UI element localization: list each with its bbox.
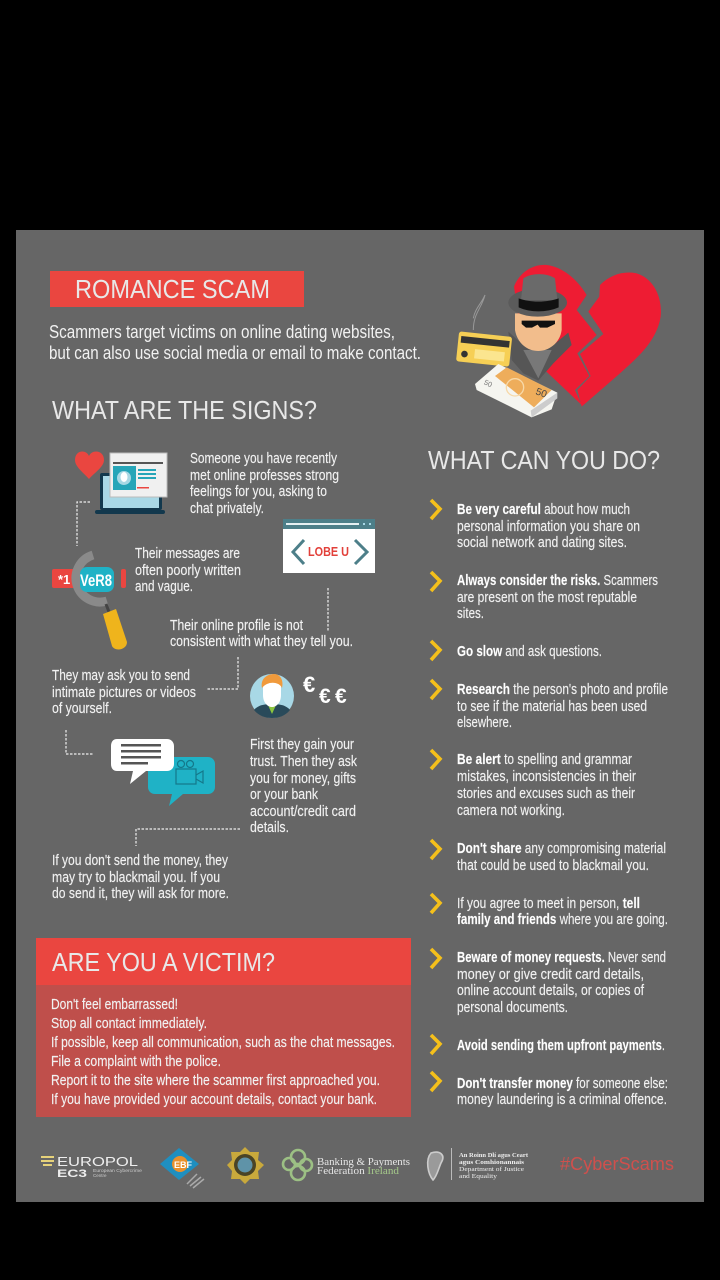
icon: avatar and euros: € [319,685,331,708]
text: advice list [457,501,668,1108]
text: poorly written: often poorly written [135,562,241,579]
panel: are you a victim: Don't feel embarrassed! [51,996,178,1013]
text: advice list: Don't transfer money for someone else: [457,1075,668,1092]
text: advice list: Go slow and ask questions. [457,643,602,660]
text: advice list: are present on the most reputable [457,589,637,606]
arrow: laptop to messages [77,502,90,546]
logo: Banking and Payments Federation Ireland: Federation Ireland [317,1166,400,1177]
icon: magnifier over garbled text [52,555,127,649]
text: advice list: that could be used to blackmail you. [457,857,649,874]
panel: are you a victim: If possible, keep all communication, such as the chat messages. [51,1034,395,1051]
icon: browser window LOBE U: LOBE U [308,544,349,559]
panel: are you a victim: Report it to the site where the scammer first approached you. [51,1072,380,1089]
text: gain your trust: First they gain your [250,736,354,753]
panel: grey background [16,230,704,1202]
logo: Banking and Payments Federation Ireland [283,1150,410,1180]
arrow: pictures text to chat bubbles [66,730,94,754]
text: blackmail: do send it, they will ask for more. [52,885,229,902]
text: gain your trust [250,736,357,836]
text: strong feelings: Someone you have recently [190,450,337,467]
icon: spy with broken heart: 50 [534,386,549,401]
text: advice list: personal documents. [457,999,568,1016]
text: intimate pictures: of yourself. [52,700,112,717]
text: advice list: mistakes, inconsistencies in their [457,768,636,785]
text: gain your trust: you for money, gifts [250,770,356,787]
arrow: trust text to blackmail text [136,829,240,846]
text: poorly written: Their messages are [135,545,240,562]
text: strong feelings: met online professes strong [190,467,339,484]
icons: yellow chevrons [431,500,440,1091]
text: advice list: money laundering is a criminal offence. [457,1091,667,1108]
icon: magnifier over garbled text: *1 [58,572,70,587]
logo: Department of Justice harp: An Roinn Dlí agus Ceart [459,1152,529,1159]
text: advice list: stories and excuses such as their [457,785,635,802]
text: advice list: social network and dating sites. [457,534,627,551]
arrow: browser to profile text [327,588,329,632]
text: inconsistent profile: consistent with what they tell you. [170,633,353,650]
text: poorly written: and vague. [135,578,193,595]
text: advice list: money or give credit card details, [457,966,644,983]
text: advice list: camera not working. [457,802,565,819]
text: advice list: Be alert to spelling and grammar [457,751,632,768]
arrow: profile text to intimate pictures [206,657,238,689]
text: blackmail: may try to blackmail you. If you [52,869,220,886]
icon: browser window LOBE U [283,519,375,573]
icon: spy with broken heart [456,265,661,417]
logo: Garda crest [227,1147,264,1184]
icon: chat bubbles [111,739,215,806]
text: advice list: to see if the material has been used [457,698,647,715]
text: intimate pictures: They may ask you to send [52,667,190,684]
heading: are you a victim: ARE YOU A VICTIM? [52,947,275,977]
text: strong feelings: chat privately. [190,500,264,517]
text: advice list: If you agree to meet in person, tell [457,895,640,912]
text: advice list: Be very careful about how much [457,501,630,518]
intro text [49,322,421,363]
text: advice list: Research the person's photo and profile [457,681,668,698]
text: gain your trust: details. [250,819,289,836]
text: strong feelings: feelings for you, asking to [190,483,327,500]
logo: Europol EC3: EC3 [57,1168,87,1180]
text: advice list: Don't share any compromising material [457,840,666,857]
heading: what can you do: WHAT CAN YOU DO? [428,445,660,475]
logo: Europol EC3 [41,1155,143,1180]
icon: avatar and euros [250,672,347,718]
text: advice list: Beware of money requests. Never send [457,949,666,966]
panel: are you a victim: File a complaint with the police. [51,1053,221,1070]
text: advice list: sites. [457,605,484,622]
text: blackmail: If you don't send the money, they [52,852,228,869]
icon: avatar and euros: € [303,672,315,697]
logo: EBF: EBF [174,1160,193,1170]
icon: spy with broken heart: 50 [482,378,494,389]
logo: Department of Justice harp: agus Comhionannais [459,1159,525,1166]
hashtag: #CyberScams [560,1154,674,1174]
icon: magnifier over garbled text: VeR8 [80,571,112,590]
text: advice list: Always consider the risks. Scammers [457,572,658,589]
logo: Europol EC3: European Cybercrime [93,1168,143,1173]
text: gain your trust: trust. Then they ask [250,753,357,770]
logo: EBF [160,1148,204,1188]
text: inconsistent profile: Their online profile is not [170,617,304,634]
text: intimate pictures: intimate pictures or videos [52,684,196,701]
text: blackmail [52,852,229,902]
text: gain your trust: account/credit card [250,803,356,820]
text: inconsistent profile [170,617,353,650]
text: advice list: personal information you share on [457,518,640,535]
text: poorly written [135,545,241,595]
text: advice list: family and friends where you are going. [457,911,668,928]
text: advice list: online account details, or copies of [457,982,645,999]
heading: what are the signs: WHAT ARE THE SIGNS? [52,395,317,425]
logo: Department of Justice harp [428,1148,529,1180]
intro text: Scammers target victims on online dating websites, [49,322,395,342]
text: advice list: elsewhere. [457,714,512,731]
logo: Department of Justice harp: and Equality [459,1173,498,1180]
title: romance scam: ROMANCE SCAM [75,274,270,304]
panel: are you a victim: Stop all contact immediately. [51,1015,207,1032]
logo: Europol EC3: EUROPOL [57,1155,138,1169]
text: strong feelings [190,450,339,517]
panel: are you a victim [36,938,411,1117]
intro text: but can also use social media or email to make contact. [49,343,421,363]
logo: Department of Justice harp: Department of Justice [459,1166,524,1173]
panel: are you a victim: If you have provided your account details, contact your bank. [51,1091,377,1108]
logo: Banking and Payments Federation Ireland: Banking & Payments [317,1157,410,1168]
logo: Europol EC3: Centre [93,1173,107,1178]
icon: avatar and euros: € [335,685,347,708]
text: gain your trust: or your bank [250,786,318,803]
icon: heart and laptop profile [75,451,167,514]
text: intimate pictures [52,667,196,717]
heading: are you a victim [36,938,411,985]
